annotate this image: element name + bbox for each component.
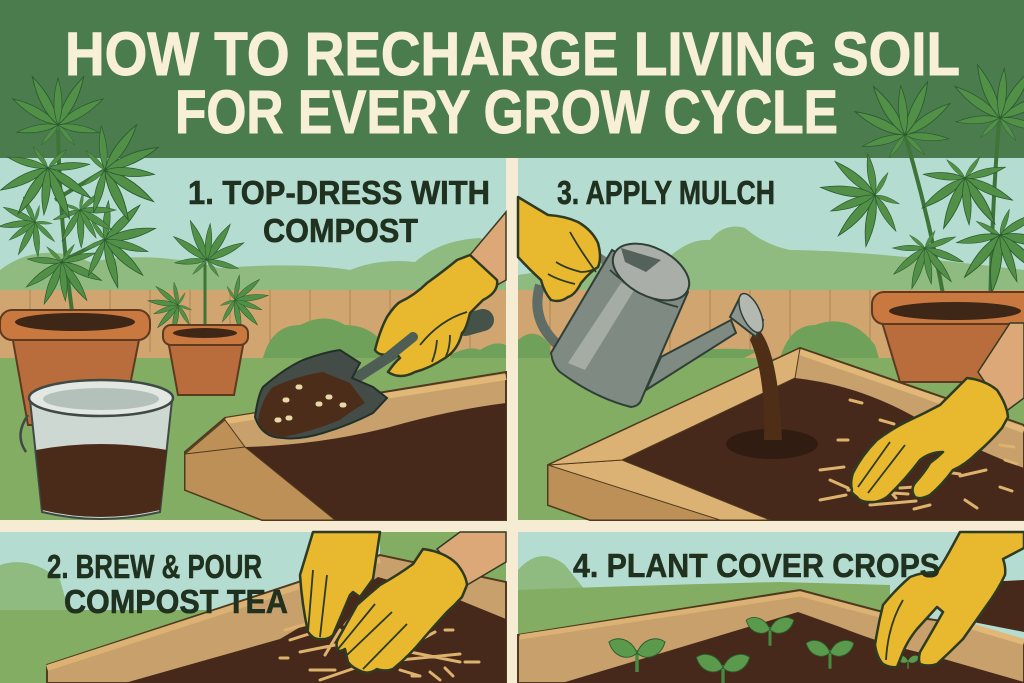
heading: step 2: 2. BREW & POUR xyxy=(47,548,262,585)
arm xyxy=(437,532,506,585)
raised bed xyxy=(47,555,506,683)
glove: cover crops hand xyxy=(875,532,1024,667)
straw mulch xyxy=(280,584,479,680)
raised bed xyxy=(518,580,1024,683)
glove: right xyxy=(336,549,467,673)
plant: large xyxy=(0,74,163,325)
plant: small xyxy=(143,218,274,339)
pot: right xyxy=(872,292,1024,382)
heading: step 1 xyxy=(188,174,490,249)
watering can xyxy=(537,232,768,407)
glove: mulch hand xyxy=(851,378,1008,502)
glove: trowel hand xyxy=(375,255,497,376)
glove: can hand xyxy=(518,197,600,301)
straw mulch xyxy=(820,400,1017,509)
heading: step 2 xyxy=(47,548,288,620)
arm: mulch hand xyxy=(978,323,1024,412)
heading: step 2: COMPOST TEA xyxy=(64,583,288,620)
pot: large xyxy=(0,310,150,425)
panel: brew and pour compost tea xyxy=(0,532,506,683)
header banner xyxy=(0,0,1024,158)
panel: top-dress with compost xyxy=(0,74,506,520)
panel: plant cover crops xyxy=(518,532,1024,683)
raised bed xyxy=(185,372,506,520)
glove: left xyxy=(300,532,380,639)
bucket of compost tea xyxy=(20,380,173,519)
heading: step 3: 3. APPLY MULCH xyxy=(557,174,775,211)
pot: small xyxy=(163,325,248,395)
heading: step 1: 1. TOP-DRESS WITH xyxy=(188,174,490,211)
pour stream xyxy=(726,327,818,459)
trowel with compost xyxy=(255,320,483,438)
heading: step 4: 4. PLANT COVER CROPS xyxy=(573,547,940,584)
heading: step 1: COMPOST xyxy=(263,212,418,249)
seedlings xyxy=(609,618,919,683)
title xyxy=(65,20,960,146)
arm xyxy=(470,212,506,285)
panel: apply mulch xyxy=(518,60,1024,520)
title: FOR EVERY GROW CYCLE xyxy=(175,78,838,146)
raised bed xyxy=(548,348,1024,520)
plant: right xyxy=(811,60,1024,315)
